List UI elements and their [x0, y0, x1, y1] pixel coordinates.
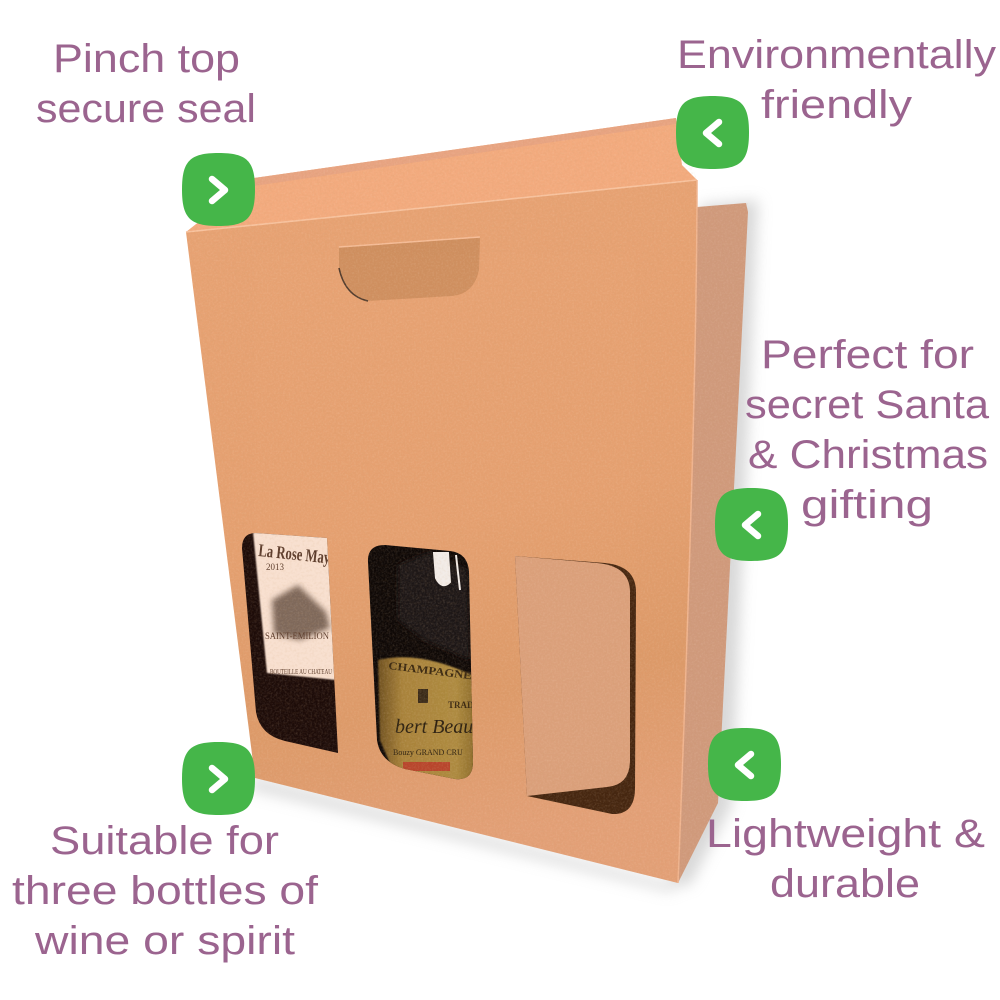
icon: right chevron button — [182, 742, 255, 815]
window 1: red wine bottle — [242, 533, 338, 753]
icon: left chevron button — [708, 728, 781, 801]
icon: right chevron button — [182, 153, 255, 226]
hole — [515, 556, 636, 814]
handle edge shadow — [339, 268, 368, 301]
text: secret Santa — [745, 383, 990, 427]
card speckle — [244, 162, 748, 812]
top pinch flap — [186, 118, 697, 232]
champagne label text: CHAMPAGNE — [388, 660, 472, 682]
text — [677, 33, 996, 127]
callout: lightweight and durable — [706, 728, 985, 906]
label text: 2013 — [266, 562, 284, 572]
glass highlight — [434, 553, 460, 590]
text: & Christmas — [748, 433, 988, 477]
callout: pinch top secure seal — [36, 37, 256, 226]
text — [745, 333, 990, 527]
crease highlight — [186, 180, 697, 232]
handle top highlight — [339, 237, 480, 247]
handle cut-out — [339, 237, 480, 301]
label text — [258, 540, 332, 676]
text: wine or spirit — [34, 919, 295, 963]
cardboard gift box — [180, 110, 755, 890]
icon: left chevron button — [676, 96, 749, 169]
text — [706, 812, 985, 906]
callout: secret Santa gifting — [715, 333, 990, 561]
label text: BOUTEILLE AU CHATEAU — [270, 668, 332, 676]
champagne label text: TRADI — [448, 700, 478, 710]
text — [12, 819, 319, 963]
front right edge — [678, 180, 697, 883]
wine label — [253, 532, 336, 680]
bottle sheen — [398, 552, 470, 660]
text: Environmentally — [677, 33, 996, 77]
text: gifting — [801, 483, 933, 527]
champagne label text: bert Beaufo — [395, 716, 489, 738]
box shadow — [250, 200, 758, 892]
text: Lightweight & — [706, 812, 985, 856]
window 3: empty slot — [515, 556, 636, 814]
front panel — [186, 180, 697, 883]
icon: left chevron button — [715, 488, 788, 561]
text: secure seal — [36, 87, 256, 131]
folded insert — [515, 556, 630, 796]
side panel — [678, 203, 748, 883]
text: Pinch top — [53, 37, 240, 81]
callout: environmentally friendly — [676, 33, 996, 169]
label text: La Rose May — [258, 540, 331, 568]
label text: SAINT-EMILION — [265, 631, 329, 641]
champagne label text: Bouzy GRAND CRU — [393, 748, 463, 757]
text: three bottles of — [12, 869, 319, 913]
text: durable — [770, 862, 920, 906]
text: Perfect for — [761, 333, 974, 377]
callout: three bottles — [12, 742, 319, 963]
text: Suitable for — [50, 819, 279, 863]
flap top edge — [254, 118, 676, 186]
card texture — [180, 110, 755, 890]
champagne label text — [389, 662, 472, 757]
text — [36, 37, 256, 131]
champagne label — [378, 657, 476, 785]
red strip — [403, 762, 450, 771]
text: friendly — [761, 83, 912, 127]
window 2: champagne bottle — [368, 545, 473, 780]
medallion — [418, 689, 428, 703]
label engraving — [272, 585, 330, 640]
